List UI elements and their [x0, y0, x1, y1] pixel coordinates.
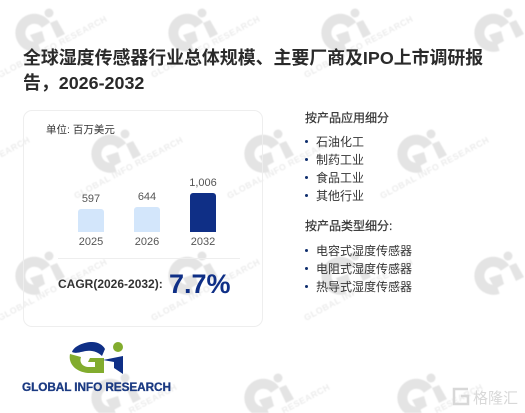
bar 2026: 644	[138, 191, 156, 203]
list: applications: 食品工业	[316, 171, 364, 185]
logo wordmark: GLOBAL INFO RESEARCH	[22, 380, 171, 394]
bar 2032: 2032	[191, 236, 215, 248]
list: types: 热导式湿度传感器	[316, 280, 412, 294]
heading: by application: 按产品应用细分	[305, 111, 389, 125]
list: types: 电阻式湿度传感器	[316, 262, 412, 276]
icon: Gi mark	[70, 342, 123, 374]
brand text: 格隆汇	[473, 390, 518, 407]
icon: G box	[454, 389, 468, 404]
CAGR value: 7.7%	[169, 269, 231, 299]
logo: Global Info Research	[22, 342, 171, 394]
bar 2025: 597	[82, 193, 100, 205]
bar 2025: 2025	[79, 236, 103, 248]
bar chart	[78, 177, 217, 248]
list: types: 电容式湿度传感器	[316, 244, 412, 258]
list: applications: 制药工业	[316, 153, 364, 167]
panel: market size card	[23, 110, 263, 327]
bar 2032	[189, 177, 217, 248]
source watermark	[452, 388, 518, 407]
CAGR label: CAGR(2026-2032):	[58, 277, 163, 291]
heading: by type: 按产品类型细分:	[305, 219, 392, 233]
list: types	[305, 244, 412, 294]
list: applications: 其他行业	[316, 189, 364, 203]
bar 2026: 2026	[135, 236, 159, 248]
title: 全球湿度传感器行业总体规模、主要厂商及IPO上市调研报告，2026-2032	[23, 48, 483, 92]
unit label: 单位: 百万美元	[46, 124, 115, 136]
bar 2026	[134, 191, 160, 248]
bar 2032: 1,006	[189, 177, 217, 189]
list: applications: 石油化工	[316, 135, 364, 149]
bar 2025	[78, 193, 104, 248]
list: applications	[305, 135, 364, 203]
